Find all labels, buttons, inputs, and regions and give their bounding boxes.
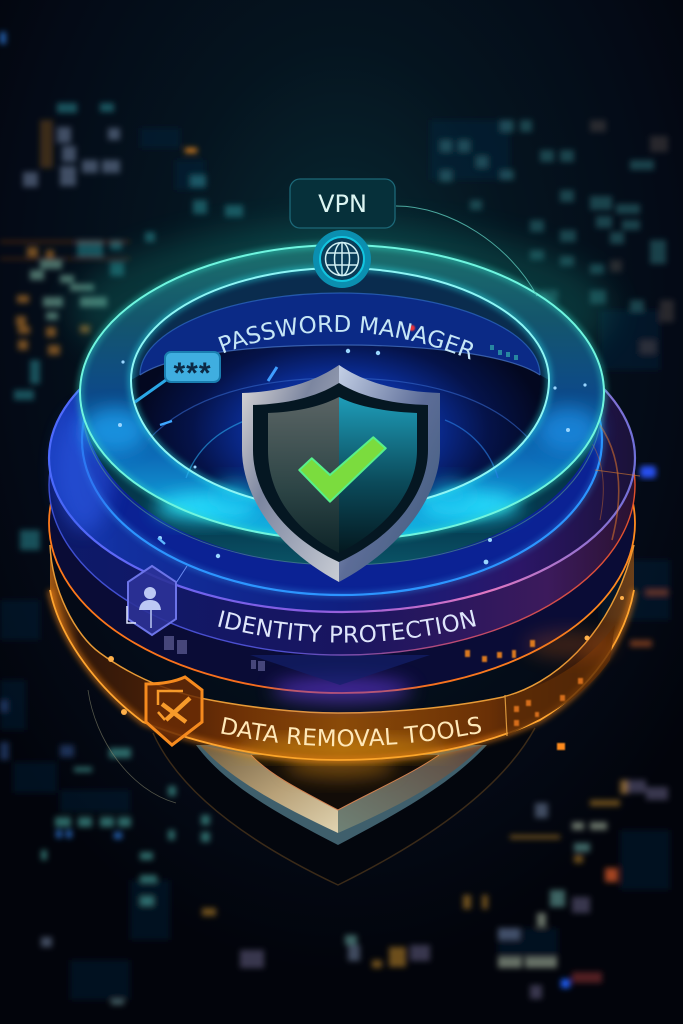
background: bright blue node [640, 466, 656, 478]
pale green blocks left [30, 260, 107, 320]
shield panel [268, 397, 339, 553]
icon: VPN globe [313, 230, 371, 288]
identity band [49, 315, 635, 655]
shield rim [242, 365, 339, 582]
ring interior [131, 268, 549, 510]
check mark [299, 437, 386, 502]
connector: VPN line [396, 206, 537, 296]
teal blocks right [440, 120, 666, 312]
password band [140, 293, 540, 375]
glowing edges [80, 245, 604, 540]
lower dark glass of ring [49, 353, 635, 693]
icon: password badge [135, 352, 220, 402]
teal blocks lower left [41, 748, 210, 906]
panel: data removal tools ring [50, 545, 634, 760]
teal blocks left [14, 103, 243, 550]
orange arcs right [600, 425, 619, 540]
background: teal glow around top ring [72, 225, 612, 395]
orange sparks [108, 596, 624, 715]
panel: password manager / VPN ring [80, 245, 604, 565]
inner blue recess [82, 285, 602, 595]
icon: data removal shield [146, 677, 202, 745]
label: data removal tools: DATA REMOVAL TOOLS [221, 716, 481, 746]
cyan glow at interior base [211, 481, 259, 509]
data tile block on right of band [505, 625, 615, 735]
shield dark interior [251, 755, 439, 810]
panel: identity protection ring [49, 285, 640, 704]
connector: lower left thin arc [88, 690, 176, 803]
interior floor arcs [148, 378, 530, 440]
label: identity protection: IDENTITY PROTECTION [218, 610, 476, 643]
label: VPN box [290, 179, 395, 228]
inner wall top [131, 268, 549, 380]
icon: password badge: *** [173, 357, 212, 390]
steel outer band [196, 745, 487, 845]
lower shield behind rings [153, 728, 535, 885]
pale blocks lower right [498, 822, 607, 968]
blue blocks at left edge [0, 700, 74, 760]
glass glow left [57, 410, 113, 530]
label: VPN box: VPN [318, 190, 367, 218]
ring outer wall [80, 395, 604, 565]
orange blocks left [16, 120, 90, 355]
faint outer shield line [153, 728, 535, 885]
icon: central shield with check [242, 365, 440, 582]
label: password manager: PASSWORD MANAGER [218, 315, 473, 360]
gold band [200, 745, 338, 833]
ring top face [80, 245, 604, 540]
slate and lilac blocks [23, 127, 548, 961]
upper face of ring [49, 304, 635, 612]
icon: identity hexagon [127, 566, 187, 635]
light sparks [118, 349, 587, 564]
